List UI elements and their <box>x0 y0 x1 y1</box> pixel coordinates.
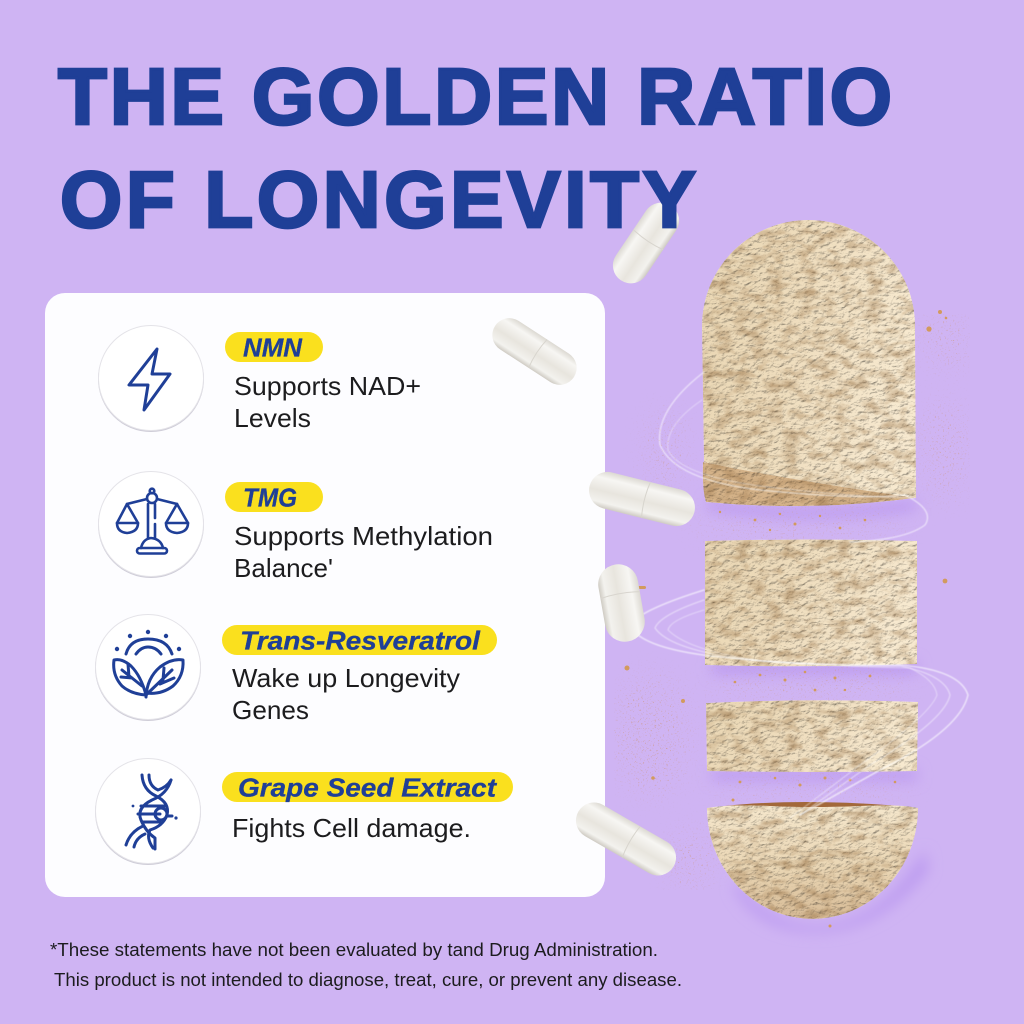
illustration: split powder capsule <box>702 220 918 919</box>
powder dust <box>614 314 970 890</box>
powder flecks <box>624 310 947 928</box>
text: NMN benefit: Supports NAD+ <box>234 371 421 401</box>
label pill: Trans-Resveratrol: Trans-Resveratrol <box>240 626 481 656</box>
powder shadows <box>708 500 928 932</box>
ingredient row: TMG <box>98 472 493 583</box>
title <box>58 52 892 244</box>
capsule: beside card top <box>486 312 583 391</box>
capsule: behind title <box>606 196 686 290</box>
powder segment: dome bottom rim <box>703 462 916 506</box>
icon: DNA helix <box>95 758 201 865</box>
ingredient row: NMN <box>98 326 421 433</box>
capsule: card edge upper <box>585 468 699 530</box>
text: TMG benefit: Balance' <box>234 553 333 583</box>
text: NMN benefit: Levels <box>234 403 311 433</box>
capsule: card edge middle <box>595 561 648 645</box>
powder segment: dome top <box>702 220 916 498</box>
title: THE GOLDEN RATIO <box>58 52 892 141</box>
text: Trans-Resveratrol benefit: Wake up Longevity <box>232 663 460 693</box>
powder segment: middle band <box>705 540 917 666</box>
ingredient row: Trans-Resveratrol <box>95 614 497 725</box>
label pill: NMN <box>225 332 323 362</box>
label pill: Grape Seed Extract: Grape Seed Extract <box>238 772 497 802</box>
swirl lines <box>630 372 968 818</box>
icon: lightning bolt <box>98 326 204 432</box>
text: Trans-Resveratrol benefit: Genes <box>232 695 309 725</box>
footer disclaimer <box>50 940 682 990</box>
ingredient row: Grape Seed Extract <box>95 758 513 865</box>
powder segment: lower band <box>706 700 918 772</box>
text: TMG benefit: Supports Methylation <box>234 521 493 551</box>
icon: balance scales <box>98 472 204 578</box>
footer disclaimer: *These statements have not been evaluated by tand Drug Administration. <box>50 940 658 960</box>
capsule: card edge lower <box>569 796 683 882</box>
panel: ingredients card <box>45 293 605 897</box>
label pill: TMG: TMG <box>243 482 297 512</box>
footer disclaimer: This product is not intended to diagnose, treat, cure, or prevent any disease. <box>54 970 682 990</box>
title: OF LONGEVITY <box>60 155 696 244</box>
powder segment: bottom hemisphere <box>707 802 918 919</box>
label pill: TMG <box>225 482 323 512</box>
icon: sun and leaves <box>95 614 201 721</box>
label pill: NMN: NMN <box>243 332 303 362</box>
text: Grape Seed Extract benefit: Fights Cell damage. <box>232 813 471 843</box>
